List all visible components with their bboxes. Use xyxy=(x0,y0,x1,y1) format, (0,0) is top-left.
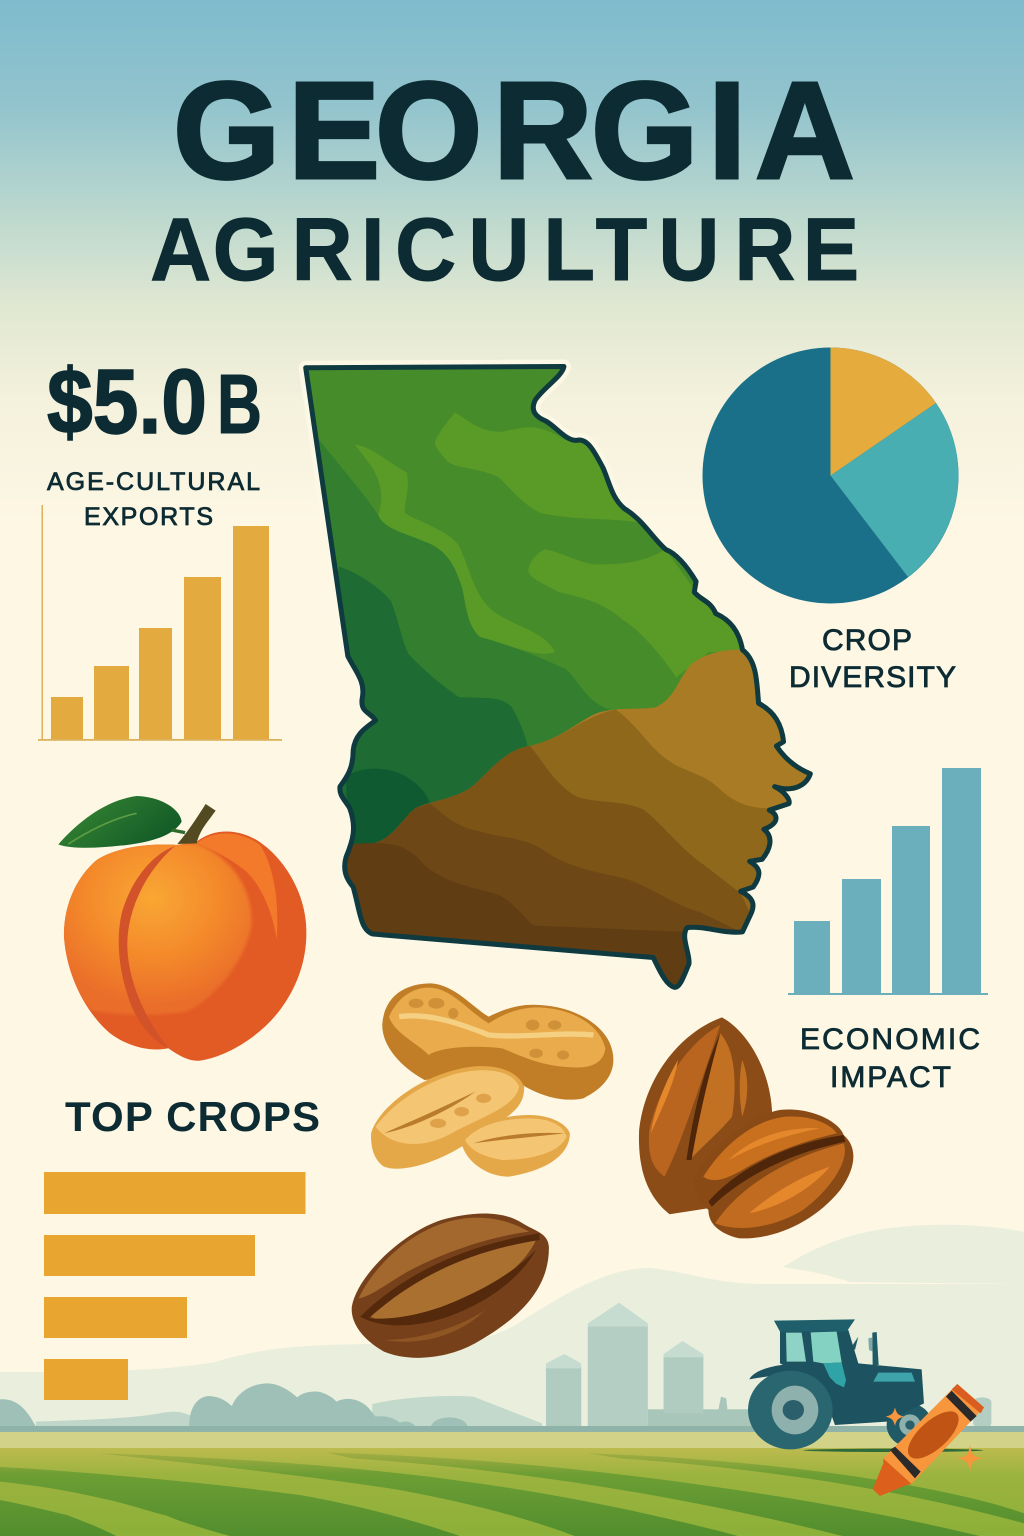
icon: peanuts xyxy=(371,983,613,1177)
label: top crops: TOP CROPS xyxy=(65,1093,320,1140)
north green zones xyxy=(308,369,740,844)
leaf xyxy=(58,796,182,848)
label: economic impact: ECONOMIC xyxy=(800,1023,980,1056)
small kernel xyxy=(462,1115,570,1177)
stem xyxy=(177,804,216,844)
stat: exports value: B xyxy=(217,357,262,451)
distant field, trees and silos xyxy=(0,1303,1024,1536)
far hills xyxy=(0,1225,1024,1435)
tilted pecan xyxy=(695,1110,853,1238)
title: Agriculture: AGRICULTURE xyxy=(150,200,859,299)
label: exports: EXPORTS xyxy=(84,503,213,531)
crop rows xyxy=(0,1448,1024,1536)
tree line xyxy=(0,1383,468,1437)
south brown zones xyxy=(347,650,807,985)
icon: peach xyxy=(58,796,306,1061)
label: exports xyxy=(47,468,260,531)
label: crop diversity xyxy=(789,624,956,694)
map of Georgia xyxy=(298,360,813,990)
label: economic impact xyxy=(800,1023,980,1094)
whole peanut xyxy=(382,983,613,1100)
label: crop diversity: DIVERSITY xyxy=(789,661,956,694)
icon: pecans xyxy=(639,1017,853,1238)
upright pecan xyxy=(639,1017,773,1214)
bar chart: exports xyxy=(38,505,282,741)
pie chart: crop diversity xyxy=(702,348,958,604)
icon: dark pecan xyxy=(352,1214,549,1358)
label: exports: AGE-CULTURAL xyxy=(47,468,260,496)
icon: crayon xyxy=(873,1384,984,1496)
landscape background xyxy=(0,1225,1024,1536)
large kernel xyxy=(371,1066,524,1169)
icon: tractor xyxy=(748,1319,983,1452)
label: crop diversity: CROP xyxy=(822,624,912,657)
bar chart: top crops xyxy=(44,1172,306,1400)
pale field band xyxy=(0,1432,1024,1449)
silos xyxy=(546,1303,752,1428)
label: economic impact: IMPACT xyxy=(830,1061,951,1094)
stat: exports value: $5.0 xyxy=(47,351,207,453)
bar chart: economic impact xyxy=(788,768,988,995)
title: Georgia: GEORGIA xyxy=(173,54,855,208)
